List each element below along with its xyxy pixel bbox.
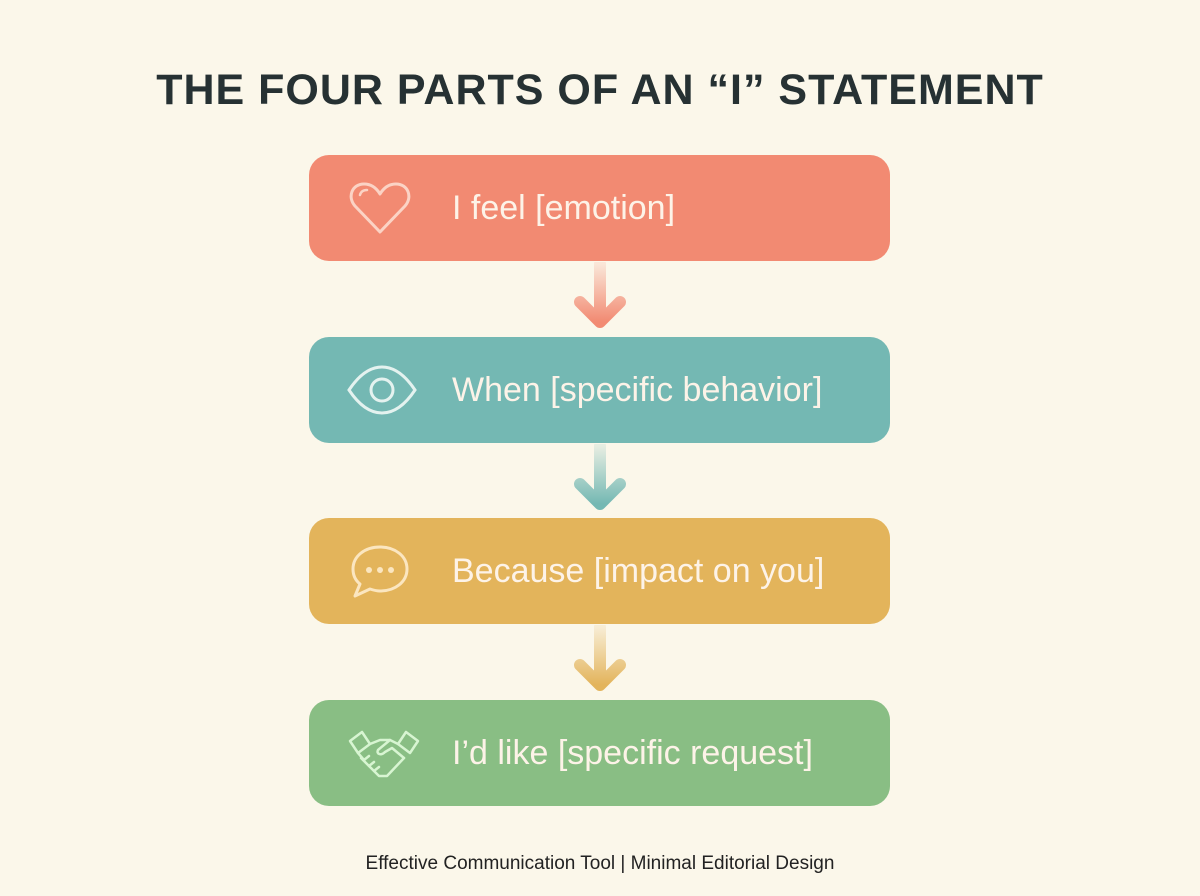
arrow 1 (574, 262, 626, 328)
arrow 2 (574, 444, 626, 510)
footer: Effective Communication Tool | Minimal Editorial Design (366, 853, 834, 874)
panel: Because (309, 518, 890, 624)
text: When [specific behavior] (452, 371, 822, 409)
icon: speech bubble (352, 546, 408, 598)
text: I feel [emotion] (452, 189, 675, 227)
icon: eye (347, 366, 417, 414)
panel: When (309, 337, 890, 443)
title: THE FOUR PARTS OF AN “I” STATEMENT (156, 66, 1044, 114)
arrow 3 (574, 625, 626, 691)
icon: handshake (348, 730, 420, 778)
text: Because [impact on you] (452, 552, 824, 590)
text: I’d like [specific request] (452, 734, 813, 772)
panel: I'd like (309, 700, 890, 806)
panel: I feel (309, 155, 890, 261)
icon: heart (350, 182, 410, 234)
